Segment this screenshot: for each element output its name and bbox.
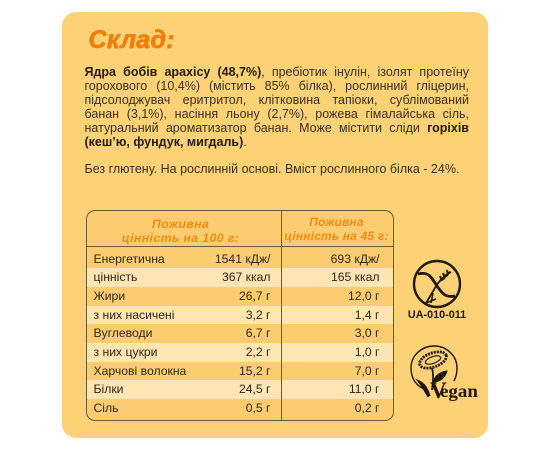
label: vegan wordmark: V <box>430 378 447 403</box>
rows: Вуглеводи <box>94 326 152 340</box>
icon: vegan mark <box>410 345 478 403</box>
text block: ingredients <box>84 64 469 148</box>
text block: ingredients: підсолоджувач еритритол, клітковина тапіоки, сублімований <box>84 92 469 106</box>
rows: 1,0 г <box>355 345 380 359</box>
heading: per 45 g <box>284 215 389 243</box>
rows: цінність <box>94 270 137 284</box>
rows: 3,0 г <box>355 326 380 340</box>
rows: з них насичені <box>94 308 174 322</box>
rows: 3,2 г <box>246 308 270 322</box>
panel: composition card <box>62 12 488 438</box>
text block: gluten free note: Без глютену. На рослинній основі. Вміст рослинного білка - 24%. <box>84 162 459 176</box>
rows: Харчові волокна <box>94 364 186 378</box>
rows: 1,4 г <box>355 308 380 322</box>
rows: 367 ккал <box>222 270 270 284</box>
icon: gluten free mark <box>408 260 466 319</box>
rows: 12,0 г <box>348 289 380 303</box>
heading: per 100 g <box>122 217 239 245</box>
rows: 24,5 г <box>239 382 270 396</box>
rows: 11,0 г <box>349 382 380 396</box>
rows: 1541 кДж/ <box>215 252 270 266</box>
rows: 2,2 г <box>246 345 270 359</box>
rows: 165 ккал <box>331 270 380 284</box>
rows: 7,0 г <box>355 364 380 378</box>
rows: Білки <box>94 382 123 396</box>
heading: per 100 g: Поживна <box>152 217 209 231</box>
rows: 0,5 г <box>246 401 270 415</box>
heading: per 45 g: цінність на 45 г: <box>284 229 389 243</box>
header rule <box>86 246 394 247</box>
column divider <box>280 211 282 420</box>
rows: 26,7 г <box>239 289 270 303</box>
rows: Сіль <box>94 401 118 415</box>
heading: per 100 g: цінність на 100 г: <box>122 231 239 245</box>
rows: 693 кДж/ <box>331 252 380 266</box>
heading: per 45 g: Поживна <box>309 215 364 229</box>
rows: Жири <box>94 289 125 303</box>
rows: 0,2 г <box>355 401 380 415</box>
rows: Енергетична <box>94 252 165 266</box>
text block: ingredients: натуральний ароматизатор банан. Може містити сліди горіхів <box>84 120 469 134</box>
text block: ingredients: горохового (10,4%) (містить 85% білка), рослинний гліцерин, <box>84 78 469 92</box>
label: vegan wordmark tail: egan <box>440 381 478 401</box>
text block: ingredients: Ядра бобів арахісу (48,7%), пребіотик інулін, ізолят протеїну <box>84 64 469 78</box>
text block: ingredients: (кеш’ю, фундук, мигдаль). <box>84 134 247 148</box>
nutrition table <box>86 210 394 420</box>
title: Склад: <box>88 26 175 54</box>
rows: 15,2 г <box>239 364 270 378</box>
text block: ingredients: банан (3,1%), насіння льону (2,7%), рожева гімалайська сіль, <box>84 106 469 120</box>
rows: 6,7 г <box>246 326 270 340</box>
rows <box>87 252 393 415</box>
rows: з них цукри <box>94 345 157 359</box>
